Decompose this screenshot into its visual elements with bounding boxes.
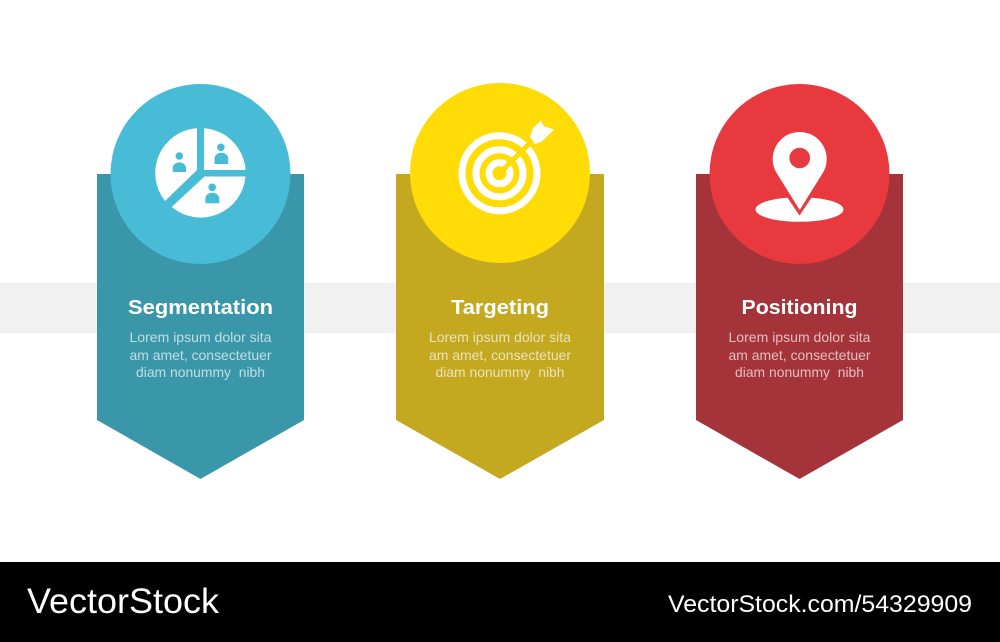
circle: targeting [410, 83, 590, 263]
arrow banner: targeting [396, 174, 604, 479]
text: positioning description: am amet, consectetuer [728, 347, 871, 363]
circle: segmentation [110, 84, 290, 264]
text: segmentation description: am amet, consectetuer [130, 347, 272, 363]
arrow banner: segmentation [97, 174, 304, 479]
heading: Segmentation: Segmentation [128, 297, 273, 319]
panel: positioning [696, 84, 903, 479]
text: positioning description: diam nonummy nibh [735, 364, 864, 380]
circle: positioning [710, 84, 890, 264]
footer logo text: VectorStock [27, 582, 220, 621]
text: segmentation description: diam nonummy nibh [136, 364, 265, 380]
footer url text: VectorStock.com/54329909 [668, 591, 972, 618]
text: segmentation description: Lorem ipsum dolor sita [130, 329, 272, 345]
text: positioning description: Lorem ipsum dolor sita [728, 329, 871, 345]
text: segmentation description [130, 329, 272, 380]
icon: dartboard with arrow [462, 120, 554, 211]
heading: Positioning: Positioning [742, 297, 858, 319]
footer bar [0, 562, 1000, 642]
icon: segmented pie chart [155, 128, 246, 218]
panel: segmentation [97, 84, 304, 479]
text: targeting description: am amet, consectetuer [429, 347, 571, 363]
heading: Targeting: Targeting [451, 297, 549, 319]
icon: map pin on ellipse [756, 132, 844, 222]
text: targeting description: Lorem ipsum dolor sita [429, 329, 571, 345]
text: targeting description [429, 329, 571, 380]
text: positioning description [728, 329, 871, 380]
text: targeting description: diam nonummy nibh [436, 364, 564, 380]
arrow banner: positioning [696, 174, 903, 479]
panel: targeting [396, 83, 604, 479]
